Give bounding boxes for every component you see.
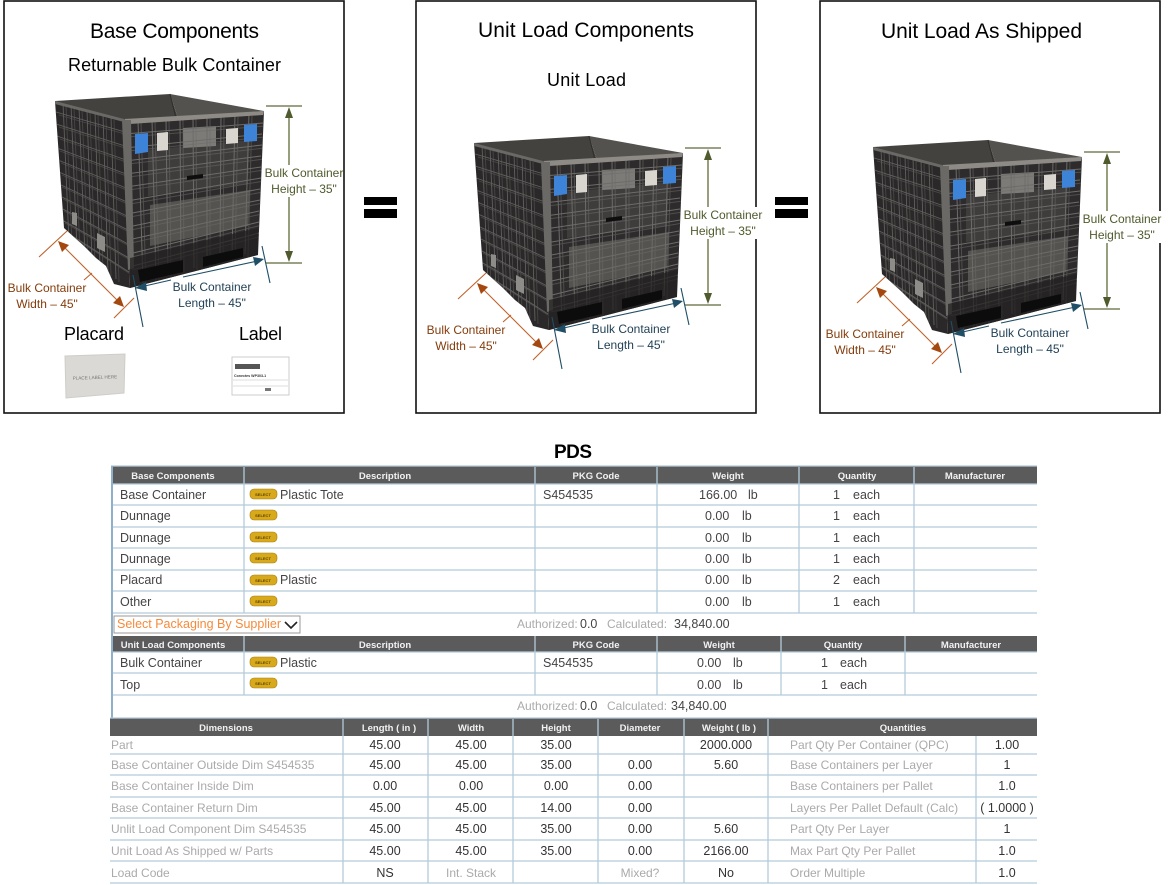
table: dimensions and quantities: ( 1.0000 )	[980, 801, 1034, 815]
table: dimensions and quantities	[110, 718, 1037, 883]
table: dimensions and quantities: Int. Stack	[446, 866, 497, 880]
table: base components: lb	[748, 488, 758, 502]
table: dimensions and quantities: Base Container Inside Dim	[111, 779, 254, 793]
authorized and calculated totals: Calculated:	[607, 617, 667, 631]
authorized and calculated totals: 0.0	[580, 617, 597, 631]
table: unit load components: Unit Load Components	[121, 640, 225, 651]
authorized and calculated totals: 0.0	[580, 699, 597, 713]
table: unit load components: Manufacturer	[941, 640, 1001, 651]
table: dimensions and quantities: 1.0	[998, 844, 1016, 858]
dimensions	[826, 152, 1161, 373]
dimensions: Length – 45"	[597, 338, 665, 352]
table: dimensions and quantities: 45.00	[369, 738, 401, 752]
table: base components: SELECT	[255, 578, 271, 583]
table: dimensions and quantities: 1.0	[998, 866, 1016, 880]
table: dimensions and quantities: Weight ( lb )	[702, 723, 756, 734]
authorized and calculated totals	[517, 699, 727, 713]
height dimension: Height – 35"	[271, 182, 337, 196]
placard image	[65, 354, 125, 398]
table: dimensions and quantities: Diameter	[620, 723, 661, 734]
bulk container photo	[55, 94, 266, 288]
table: dimensions and quantities: 45.00	[369, 801, 401, 815]
table: base components: Base Components	[131, 471, 215, 482]
table: unit load components: each	[840, 678, 867, 692]
placard heading: Placard	[64, 324, 124, 344]
table: dimensions and quantities: Base Container Return Dim	[111, 801, 258, 815]
dimensions: Bulk Container	[826, 327, 904, 341]
authorized and calculated totals: 34,840.00	[674, 617, 730, 631]
table: base components: 1	[833, 552, 840, 566]
length dimension: Bulk Container	[173, 280, 251, 294]
table: base components: 0.00	[705, 509, 729, 523]
table: base components: Other	[120, 595, 151, 609]
table: base components: 0.00	[705, 595, 729, 609]
heading: unit load components: Unit Load Components	[478, 19, 694, 42]
authorized and calculated totals: Authorized:	[517, 699, 578, 713]
table: unit load components: Plastic	[280, 656, 317, 670]
table: unit load components	[112, 466, 1037, 718]
table: dimensions and quantities: Base Containers per Layer	[790, 758, 933, 772]
table: base components: SELECT	[255, 599, 271, 604]
table: dimensions and quantities: No	[718, 866, 734, 880]
table: base components: 2	[833, 573, 840, 587]
table: dimensions and quantities: 0.00	[373, 779, 397, 793]
table: unit load components: Description	[359, 640, 411, 651]
table: dimensions and quantities: Base Container Outside Dim S454535	[111, 758, 315, 772]
table: base components: lb	[742, 595, 752, 609]
table: dimensions and quantities: 45.00	[369, 822, 401, 836]
table: dimensions and quantities: Part Qty Per Container (QPC)	[790, 738, 949, 752]
table: dimensions and quantities: Length ( in )	[362, 723, 416, 734]
table: base components: 1	[833, 509, 840, 523]
table: dimensions and quantities: Dimensions	[199, 723, 253, 734]
table: base components: Plastic	[280, 573, 317, 587]
table: dimensions and quantities: 0.00	[628, 844, 652, 858]
table: dimensions and quantities: 45.00	[455, 844, 487, 858]
heading: PDS: PDS	[554, 442, 592, 463]
table: dimensions and quantities: Base Containers per Pallet	[790, 779, 933, 793]
supplier dropdown: Select Packaging By Supplier	[117, 617, 281, 631]
table: dimensions and quantities: 35.00	[540, 844, 572, 858]
table: dimensions and quantities: Max Part Qty Per Pallet	[790, 844, 916, 858]
table: base components: lb	[742, 552, 752, 566]
table: base components: each	[853, 552, 880, 566]
table: base components: Dunnage	[120, 509, 171, 523]
authorized and calculated totals: Authorized:	[517, 617, 578, 631]
table: dimensions and quantities: Layers Per Pallet Default (Calc)	[790, 801, 958, 815]
bulk container photo	[873, 140, 1084, 334]
table: dimensions and quantities: 1	[1004, 758, 1011, 772]
table: dimensions and quantities: 0.00	[628, 758, 652, 772]
panel: unit load components	[416, 1, 762, 413]
table: base components: 0.00	[705, 552, 729, 566]
dimensions: Width – 45"	[435, 339, 497, 353]
table: unit load components: S454535	[543, 656, 593, 670]
heading: unit load as shipped: Unit Load As Shipped	[881, 20, 1082, 43]
table: dimensions and quantities: Width	[458, 723, 484, 734]
panel: unit load as shipped	[820, 1, 1161, 413]
dimensions: Length – 45"	[996, 342, 1064, 356]
table: dimensions and quantities: 45.00	[455, 822, 487, 836]
table: dimensions and quantities: Unit Load As Shipped w/ Parts	[111, 844, 273, 858]
placard image: PLACE LABEL HERE	[73, 374, 117, 381]
table: dimensions and quantities: Order Multiple	[790, 866, 866, 880]
dimensions	[427, 148, 762, 369]
table: base components: SELECT	[255, 556, 271, 561]
table: dimensions and quantities: 14.00	[540, 801, 572, 815]
table: dimensions and quantities: 35.00	[540, 758, 572, 772]
table: dimensions and quantities: 5.60	[714, 758, 738, 772]
table: dimensions and quantities: Quantities	[880, 723, 926, 734]
length dimension: Length – 45"	[178, 296, 246, 310]
width dimension: Width – 45"	[16, 297, 78, 311]
dimensions: Bulk Container	[684, 208, 762, 222]
sub-heading: unit load: Unit Load	[547, 70, 626, 90]
table: unit load components: Top	[120, 678, 140, 692]
dimensions: Bulk Container	[1083, 212, 1161, 226]
table: base components: Plastic Tote	[280, 488, 344, 502]
authorized and calculated totals: 34,840.00	[671, 699, 727, 713]
table: base components: 1	[833, 595, 840, 609]
table: dimensions and quantities: 1.0	[998, 779, 1016, 793]
table: dimensions and quantities: 0.00	[459, 779, 483, 793]
table: dimensions and quantities: 45.00	[455, 738, 487, 752]
dimensions: Bulk Container	[592, 322, 670, 336]
table: dimensions and quantities: Part Qty Per Layer	[790, 822, 889, 836]
table: base components: lb	[742, 531, 752, 545]
table: unit load components: SELECT	[255, 660, 271, 665]
table: dimensions and quantities: 5.60	[714, 822, 738, 836]
table: unit load components: lb	[733, 678, 743, 692]
table: unit load components: 0.00	[697, 656, 721, 670]
table: base components: 1	[833, 531, 840, 545]
table: dimensions and quantities: 0.00	[628, 822, 652, 836]
authorized and calculated totals: Calculated:	[607, 699, 667, 713]
table: dimensions and quantities: 2166.00	[703, 844, 749, 858]
table: base components: Dunnage	[120, 552, 171, 566]
dimensions: Height – 35"	[1089, 228, 1155, 242]
dimensions: Width – 45"	[834, 343, 896, 357]
table: base components: each	[853, 595, 880, 609]
table: dimensions and quantities: 45.00	[455, 801, 487, 815]
table: base components: SELECT	[255, 492, 271, 497]
table: base components: S454535	[543, 488, 593, 502]
table: base components: Quantity	[838, 471, 877, 482]
label image	[232, 357, 289, 395]
table: base components: each	[853, 573, 880, 587]
table: unit load components: each	[840, 656, 867, 670]
table: unit load components: 1	[821, 678, 828, 692]
table: dimensions and quantities: NS	[376, 866, 394, 880]
dimensions: Bulk Container	[427, 323, 505, 337]
equals sign	[364, 197, 397, 218]
table: dimensions and quantities: 0.00	[544, 779, 568, 793]
table: unit load components: Bulk Container	[120, 656, 202, 670]
table: dimensions and quantities: Mixed?	[621, 866, 660, 880]
table: base components: 0.00	[705, 531, 729, 545]
table: base components: SELECT	[255, 513, 271, 518]
table: unit load components: 1	[821, 656, 828, 670]
table: dimensions and quantities: Load Code	[111, 866, 170, 880]
dimensions: Bulk Container	[991, 326, 1069, 340]
table: dimensions and quantities: Height	[541, 723, 572, 734]
table: base components: SELECT	[255, 535, 271, 540]
height dimension: Bulk Container	[265, 166, 343, 180]
table: dimensions and quantities: Unlit Load Component Dim S454535	[111, 822, 307, 836]
table: dimensions and quantities: 35.00	[540, 822, 572, 836]
table: dimensions and quantities: 2000.000	[700, 738, 752, 752]
table: base components: Description	[359, 471, 411, 482]
table: dimensions and quantities: Part	[111, 738, 134, 752]
table: dimensions and quantities: 0.00	[628, 801, 652, 815]
table: base components: lb	[742, 573, 752, 587]
table: unit load components: PKG Code	[573, 640, 619, 651]
table: base components: each	[853, 488, 880, 502]
table: base components: 166.00	[699, 488, 737, 502]
table: unit load components: Quantity	[824, 640, 863, 651]
heading: base components: Base Components	[90, 20, 259, 43]
label image: Conectes WP303-1	[234, 374, 266, 378]
equals sign	[775, 197, 808, 218]
table: dimensions and quantities: 45.00	[369, 844, 401, 858]
length dimension	[133, 246, 270, 327]
table: unit load components: Weight	[703, 640, 736, 651]
table: dimensions and quantities: 45.00	[455, 758, 487, 772]
dimensions: Height – 35"	[690, 224, 756, 238]
table: base components: lb	[742, 509, 752, 523]
width dimension: Bulk Container	[8, 281, 86, 295]
sub-heading: returnable bulk container: Returnable Bulk Container	[68, 55, 281, 75]
table: unit load components: 0.00	[697, 678, 721, 692]
table: base components: each	[853, 531, 880, 545]
width dimension	[8, 231, 134, 318]
table: base components: 1	[833, 488, 840, 502]
table: dimensions and quantities: 45.00	[369, 758, 401, 772]
table: base components: Base Container	[120, 488, 206, 502]
table: unit load components: lb	[733, 656, 743, 670]
table: base components: each	[853, 509, 880, 523]
table: base components: PKG Code	[573, 471, 619, 482]
table: base components: Manufacturer	[945, 471, 1005, 482]
authorized and calculated totals	[517, 617, 730, 631]
panel: base components	[4, 1, 344, 413]
table: dimensions and quantities: 1.00	[995, 738, 1019, 752]
label heading: Label	[239, 324, 282, 344]
height dimension	[264, 106, 343, 263]
table: dimensions and quantities: 35.00	[540, 738, 572, 752]
table: dimensions and quantities: 0.00	[628, 779, 652, 793]
bulk container photo	[474, 136, 685, 330]
table: base components: Placard	[120, 573, 162, 587]
table: base components: Weight	[712, 471, 745, 482]
table: base components: 0.00	[705, 573, 729, 587]
table: unit load components: SELECT	[255, 681, 271, 686]
table: base components	[111, 466, 1037, 613]
table: base components: Dunnage	[120, 531, 171, 545]
table: dimensions and quantities: 1	[1004, 822, 1011, 836]
